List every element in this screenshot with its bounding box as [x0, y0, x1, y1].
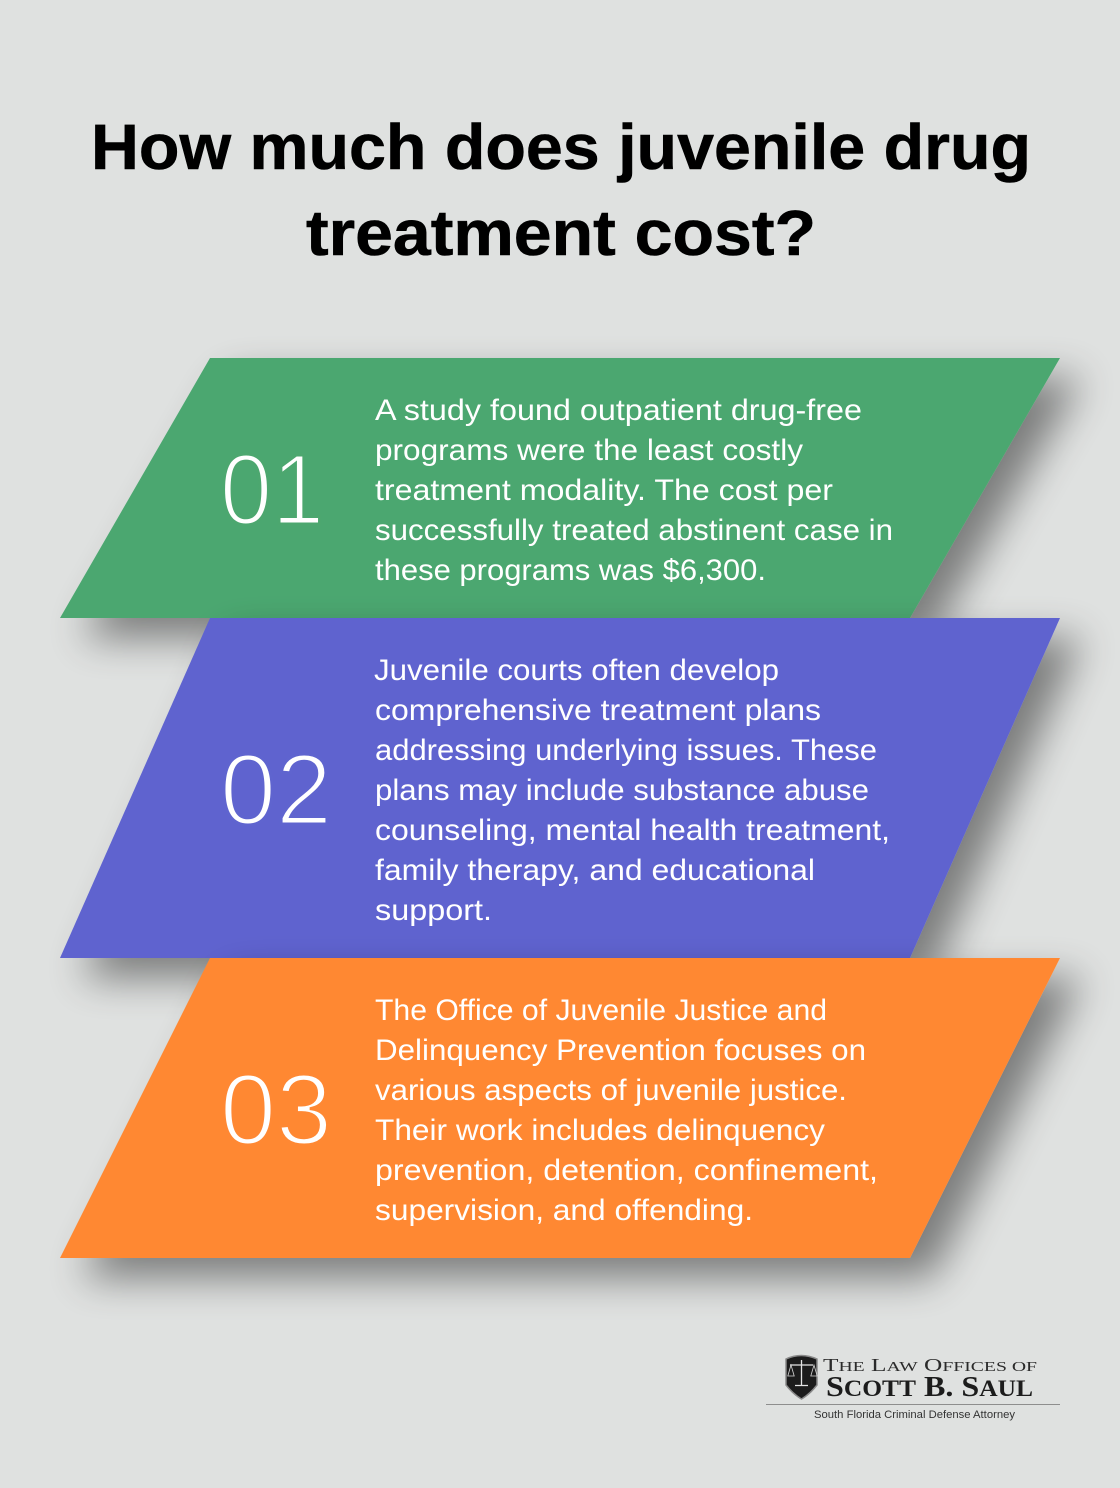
text block 03: Delinquency Prevention focuses on [375, 1034, 866, 1067]
text block 01: A study found outpatient drug-free [375, 394, 862, 427]
text block 01: these programs was $6,300. [375, 554, 766, 587]
icon: shield with scales [786, 1356, 817, 1399]
logo line 1: T HE L AW O FFICES OF [823, 1355, 1037, 1375]
title: How much does juvenile drug [91, 111, 1031, 183]
logo tagline: South Florida Criminal Defense Attorney [814, 1409, 1016, 1421]
logo divider [766, 1404, 1060, 1405]
text block 03: various aspects of juvenile justice. [375, 1074, 847, 1107]
panel: step 03 [60, 958, 1060, 1258]
orange parallelogram [60, 958, 1060, 1258]
title [91, 111, 1031, 269]
number 02: 02 [220, 734, 332, 846]
text block 02: plans may include substance abuse [375, 774, 869, 807]
text block 03 [375, 994, 878, 1227]
green parallelogram [60, 358, 1060, 618]
blue parallelogram [60, 618, 1060, 958]
text block 02: counseling, mental health treatment, [375, 814, 890, 847]
logo: law offices [766, 1355, 1060, 1421]
text block 01 [375, 394, 893, 587]
text block 02: support. [375, 894, 492, 927]
text block 03: prevention, detention, confinement, [375, 1154, 878, 1187]
text block 03: supervision, and offending. [375, 1194, 753, 1227]
title: treatment cost? [306, 197, 816, 269]
text block 01: programs were the least costly [375, 434, 803, 467]
number 03: 03 [220, 1054, 332, 1166]
text block 02: family therapy, and educational [375, 854, 815, 887]
text block 01: treatment modality. The cost per [375, 474, 833, 507]
text block 03: Their work includes delinquency [375, 1114, 825, 1147]
text block 02: Juvenile courts often develop [374, 654, 779, 687]
text block 01: successfully treated abstinent case in [375, 514, 893, 547]
text block 03: The Office of Juvenile Justice and [375, 994, 827, 1027]
number 01: 01 [220, 434, 324, 546]
text block 02 [374, 654, 890, 927]
logo line 2: SCOTT B. S AUL [826, 1371, 1033, 1403]
text block 02: comprehensive treatment plans [375, 694, 821, 727]
panel: step 02 [60, 618, 1060, 958]
panel: step 01 [60, 358, 1060, 618]
text block 02: addressing underlying issues. These [375, 734, 877, 767]
